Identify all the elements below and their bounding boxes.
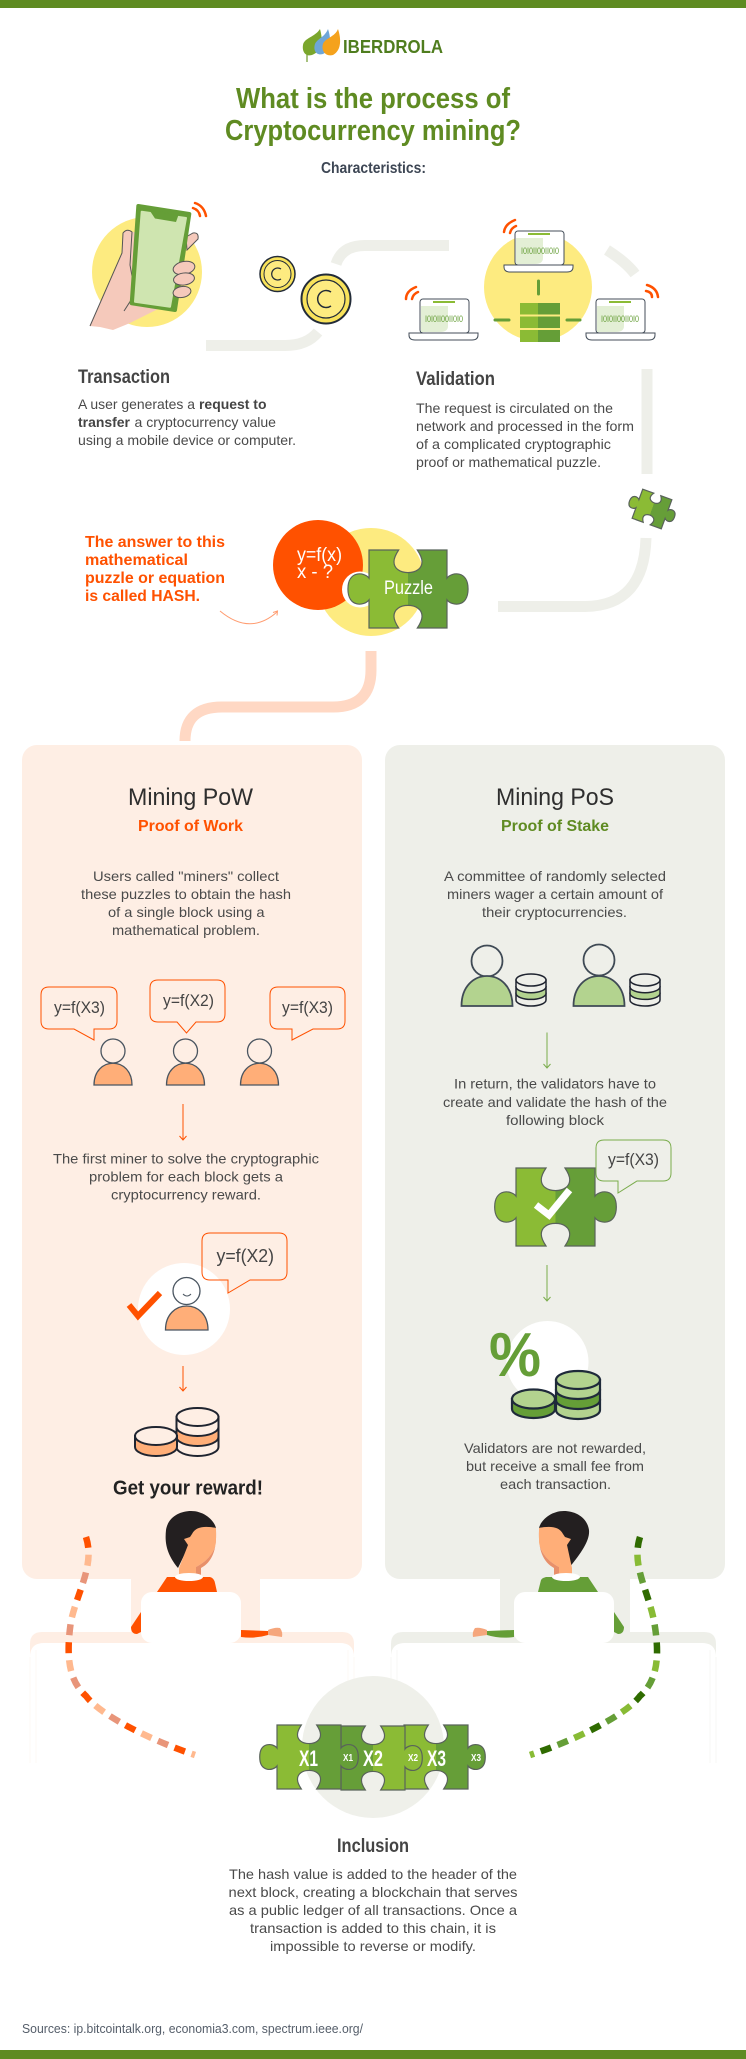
callout: hash answer: The answer to this — [85, 534, 225, 551]
text: transaction: Transaction — [78, 366, 170, 388]
logo: Iberdrola — [303, 29, 443, 62]
callout: hash answer — [85, 534, 225, 605]
text: first miner: The first miner to solve the cryptographic — [53, 1150, 319, 1166]
text: validators not rewarded — [464, 1440, 646, 1492]
text: transaction — [78, 366, 296, 448]
icon: blockchain puzzle chain: X3 — [427, 1746, 446, 1771]
icon: validation network: I0I0II00II0I0 — [601, 314, 639, 324]
text: validators return — [443, 1076, 667, 1128]
bottom bar — [0, 2050, 746, 2059]
arrow — [544, 1265, 550, 1301]
speech bubbles — [41, 980, 345, 1040]
text: inclusion: transaction is added to this chain, it is — [250, 1920, 496, 1936]
icon: hand holding phone — [90, 203, 206, 330]
text: inclusion — [228, 1835, 518, 1954]
text: validators return: following block — [506, 1112, 605, 1128]
icon: coins — [260, 256, 350, 324]
text: committee — [444, 868, 666, 920]
icon: validation network — [406, 220, 658, 342]
icon: percent fee with coins: % — [489, 1321, 541, 1390]
icon: validation network: I0I0II00II0I0 — [521, 246, 559, 256]
text: transaction: a cryptocurrency value — [134, 414, 276, 430]
text: inclusion: Inclusion — [337, 1835, 409, 1857]
text: miners intro: mathematical problem. — [112, 922, 260, 938]
icon: validators with coins — [462, 944, 660, 1006]
text: transaction: request to — [199, 396, 266, 412]
text: committee: their cryptocurrencies. — [482, 904, 627, 920]
subheading: Proof of Stake: Proof of Stake — [501, 818, 609, 835]
icon: blockchain puzzle chain: X2 — [363, 1746, 383, 1771]
icon: validated puzzle: y=f(X3) — [608, 1151, 659, 1169]
text: validators not rewarded: each transaction. — [500, 1476, 611, 1492]
text: validators return: create and validate the hash of the — [443, 1094, 667, 1110]
text: inclusion: next block, creating a blockchain that serves — [228, 1884, 518, 1900]
arrow — [180, 1104, 186, 1140]
dashed path: PoW to inclusion — [69, 1537, 195, 1755]
icon: reward coins — [135, 1408, 218, 1456]
desk and backdrop: PoS — [391, 1570, 716, 1763]
text: miners intro: Users called "miners" collect — [93, 868, 279, 884]
callout: hash answer: mathematical — [85, 552, 188, 569]
desk and backdrop: PoW — [30, 1570, 354, 1763]
text: validation: The request is circulated on the — [416, 400, 613, 416]
panel: Mining PoS — [385, 745, 725, 1579]
text: validation: network and processed in the form — [416, 418, 634, 434]
icon: puzzle equation — [273, 520, 468, 636]
text: miners intro: these puzzles to obtain the hash — [81, 886, 291, 902]
title: Cryptocurrency mining? — [225, 115, 521, 147]
icon: winning miner — [129, 1233, 287, 1355]
connector: puzzle to panels — [185, 651, 371, 741]
callout: hash answer: puzzle or equation — [85, 570, 225, 587]
text: validators not rewarded: but receive a small fee from — [466, 1458, 644, 1474]
text: first miner — [53, 1150, 319, 1202]
text: transaction: using a mobile device or computer. — [78, 432, 296, 448]
text: transaction: transfer — [78, 414, 131, 430]
text: committee: A committee of randomly selected — [444, 868, 666, 884]
text: first miner: problem for each block gets a — [89, 1168, 283, 1184]
icon: puzzle equation: Puzzle — [384, 578, 433, 599]
bubble labels — [54, 992, 333, 1017]
text: validators not rewarded: Validators are not rewarded, — [464, 1440, 646, 1456]
text: inclusion: as a public ledger of all transactions. Once a — [229, 1902, 517, 1918]
icon: puzzle equation: x - ? — [297, 562, 333, 583]
text: validators return: In return, the validators have to — [454, 1076, 656, 1092]
title: What is the process of — [236, 83, 510, 115]
text: validation: proof or mathematical puzzle. — [416, 454, 601, 470]
icon: three miners — [94, 1039, 278, 1085]
sources: Sources: ip.bitcointalk.org, economia3.com, spectrum.ieee.org/ — [22, 2021, 363, 2036]
icon: validated puzzle — [495, 1140, 671, 1246]
arrow — [544, 1032, 550, 1068]
heading: Mining PoS: Mining PoS — [496, 784, 614, 811]
icon: winning miner: y=f(X2) — [216, 1246, 274, 1266]
icon: blockchain puzzle chain: X3 — [471, 1752, 481, 1764]
logo: Iberdrola: IBERDROLA — [343, 37, 443, 57]
icon: validation network: I0I0II00II0I0 — [425, 314, 463, 324]
text: inclusion: The hash value is added to the header of the — [229, 1866, 517, 1882]
callout: hash answer: is called HASH. — [85, 588, 200, 605]
text: validation — [416, 368, 634, 470]
dashed path: PoS to inclusion — [530, 1537, 657, 1755]
title — [225, 83, 521, 147]
subheading: Proof of Work: Proof of Work — [138, 818, 243, 835]
connector: coins to validation — [206, 246, 647, 606]
arrow: hash callout — [220, 611, 278, 624]
text: first miner: cryptocurrency reward. — [111, 1186, 261, 1202]
subtitle: Characteristics: — [321, 160, 426, 177]
bubble labels: y=f(X2) — [163, 992, 214, 1010]
text: validation: of a complicated cryptographic — [416, 436, 611, 452]
icon: percent fee with coins — [489, 1321, 600, 1419]
text: transaction: A user generates a — [78, 396, 195, 412]
bubble labels: y=f(X3) — [282, 999, 333, 1017]
illustration: PoW miner at computer — [131, 1511, 282, 1643]
illustration: PoS miner at computer — [473, 1511, 624, 1643]
text: miners intro: of a single block using a — [108, 904, 265, 920]
callout: get your reward: Get your reward! — [113, 1478, 263, 1500]
icon: blockchain puzzle chain — [260, 1676, 485, 1818]
text: miners intro — [81, 868, 291, 938]
icon: blockchain puzzle chain: X1 — [299, 1746, 318, 1771]
text: validation: Validation — [416, 368, 495, 390]
text: committee: miners wager a certain amount of — [447, 886, 663, 902]
text: inclusion: impossible to reverse or modify. — [270, 1938, 476, 1954]
icon: blockchain puzzle chain: X2 — [408, 1752, 418, 1764]
heading: Mining PoW: Mining PoW — [128, 784, 253, 811]
icon: small puzzle piece — [624, 486, 680, 532]
arrow — [180, 1366, 186, 1391]
panel: Mining PoW — [22, 745, 362, 1579]
icon: puzzle equation: y=f(x) — [297, 545, 342, 566]
icon: blockchain puzzle chain: X1 — [343, 1752, 353, 1764]
top bar — [0, 0, 746, 8]
bubble labels: y=f(X3) — [54, 999, 105, 1017]
